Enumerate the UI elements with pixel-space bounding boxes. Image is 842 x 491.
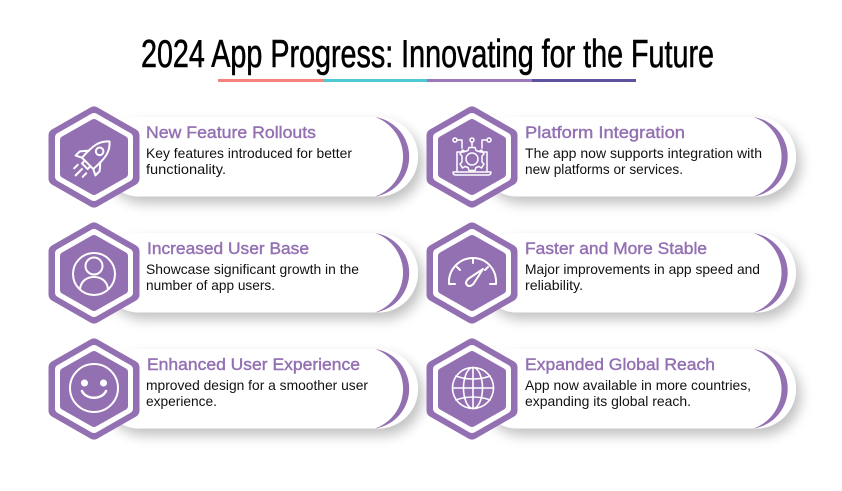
title underline (218, 79, 636, 82)
panel: Platform Integration (434, 114, 796, 200)
text block: new platforms or services. (525, 161, 683, 177)
icon: globe (434, 346, 510, 432)
panel: Faster and More Stable (434, 230, 796, 316)
icon: user (56, 230, 132, 316)
icon: rocket (56, 114, 132, 200)
text block: The app now supports integration with (525, 145, 762, 161)
panel: Increased User Base (56, 230, 418, 316)
panel: New Feature Rollouts (56, 114, 418, 200)
text block (146, 377, 368, 409)
icon: speedometer (434, 230, 510, 316)
heading: Expanded Global Reach (525, 356, 715, 374)
text block: reliability. (525, 277, 583, 293)
text block (146, 145, 352, 177)
heading: Enhanced User Experience (147, 356, 360, 374)
text block: number of app users. (146, 277, 275, 293)
heading: Platform Integration (525, 124, 685, 142)
text block: Showcase significant growth in the (146, 261, 359, 277)
text block: Major improvements in app speed and (525, 261, 760, 277)
heading: Increased User Base (147, 240, 309, 258)
heading: New Feature Rollouts (146, 124, 316, 142)
icon: laptop with gear (434, 114, 510, 200)
text block: mproved design for a smoother user (146, 377, 368, 393)
panel: Expanded Global Reach (434, 346, 796, 432)
icon: smiley (56, 346, 132, 432)
heading: Faster and More Stable (525, 240, 707, 258)
text block: experience. (146, 393, 217, 409)
text block (525, 261, 760, 293)
panel: Enhanced User Experience (56, 346, 418, 432)
text block: App now available in more countries, (525, 377, 751, 393)
text block (525, 145, 762, 177)
text block (525, 377, 751, 409)
text block: expanding its global reach. (525, 393, 691, 409)
text block (146, 261, 359, 293)
text block: Key features introduced for better (146, 145, 352, 161)
text block: functionality. (146, 161, 226, 177)
